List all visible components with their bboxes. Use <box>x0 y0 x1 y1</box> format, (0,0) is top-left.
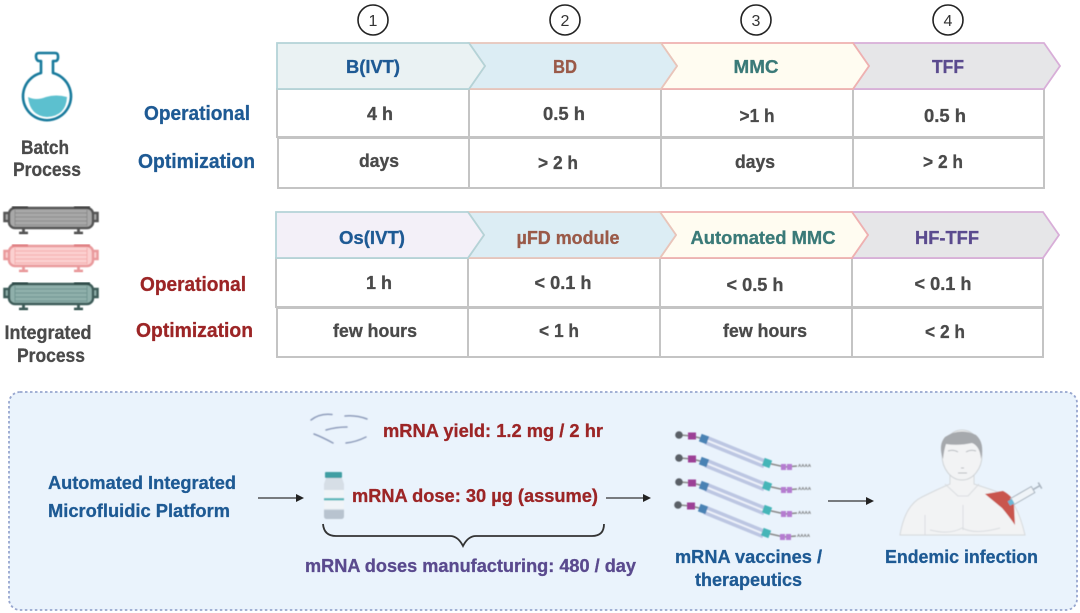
mRNA construct 2: AAAA <box>798 486 812 491</box>
batch optimization values <box>359 151 963 173</box>
step 1 marker: 1 <box>369 13 378 30</box>
icon: pink hollow fiber module <box>4 246 98 271</box>
step 2 marker <box>550 5 580 35</box>
integrated optimization values: < 2 h <box>925 322 965 342</box>
integrated header labels <box>339 228 979 248</box>
mRNA vaccines label: therapeutics <box>695 569 802 590</box>
integrated optimization values: few hours <box>333 321 417 341</box>
integrated operational values <box>366 273 972 295</box>
icon: green hollow fiber module <box>4 284 98 309</box>
mRNA vaccines label <box>675 546 822 590</box>
icon: grey hollow fiber module <box>4 208 98 233</box>
batch row labels <box>138 103 255 173</box>
batch operational values: 0.5 h <box>543 104 585 124</box>
step 3 marker <box>741 5 771 35</box>
brace <box>323 524 604 546</box>
arrow: platform to dose <box>258 494 304 502</box>
batch operational values: >1 h <box>740 106 774 126</box>
doses manufacturing text: mRNA doses manufacturing: 480 / day <box>305 555 637 576</box>
batch optimization values: days <box>359 151 399 171</box>
integrated table grid <box>276 258 1043 357</box>
panel: automated integrated platform <box>9 392 1077 610</box>
step 3 marker: 3 <box>752 13 761 30</box>
endemic infection label: Endemic infection <box>885 546 1038 567</box>
batch optimization values: > 2 h <box>538 153 578 173</box>
batch header labels: MMC <box>734 57 778 77</box>
integrated header labels: Os(IVT) <box>339 228 405 248</box>
integrated row labels: Optimization <box>136 320 253 342</box>
mRNA dose text: mRNA dose: 30 µg (assume) <box>352 485 598 506</box>
panel: batch process table <box>277 43 1060 188</box>
panel: integrated process table <box>276 212 1059 357</box>
integrated optimization values <box>333 321 965 342</box>
integrated header labels: Automated MMC <box>690 228 836 248</box>
icon: batch flask <box>23 53 71 120</box>
integrated operational values: < 0.1 h <box>914 274 972 294</box>
integrated operational values: < 0.1 h <box>534 273 592 293</box>
batch optimization values: > 2 h <box>923 152 963 172</box>
integrated row labels: Operational <box>140 274 246 296</box>
step 4 marker <box>933 5 963 35</box>
integrated header chevrons <box>276 212 1059 258</box>
icon: vial <box>324 472 344 519</box>
platform title: Microfluidic Platform <box>48 500 230 521</box>
icon: patient receiving injection <box>900 430 1042 535</box>
integrated header labels: HF-TFF <box>915 228 979 248</box>
step 1 marker <box>358 5 388 35</box>
batch table grid <box>277 89 1044 188</box>
integrated row labels <box>136 274 253 342</box>
integrated operational values: < 0.5 h <box>726 275 784 295</box>
mRNA construct 1: AAAA <box>798 463 812 468</box>
batch row labels: Operational <box>144 103 250 125</box>
step 4 marker: 4 <box>944 13 953 30</box>
batch process label: Process <box>13 160 81 181</box>
batch header labels <box>346 57 964 77</box>
mRNA yield text: mRNA yield: 1.2 mg / 2 hr <box>383 420 603 441</box>
batch operational values: 4 h <box>367 104 393 124</box>
batch header labels: BD <box>553 57 577 77</box>
batch row labels: Optimization <box>138 151 255 173</box>
batch header labels: TFF <box>932 57 964 77</box>
batch header chevrons <box>277 43 1060 89</box>
batch operational values <box>367 104 966 126</box>
icon: mRNA constructs <box>674 431 812 540</box>
integrated optimization values: < 1 h <box>539 321 579 341</box>
integrated process label: Process <box>17 346 85 367</box>
integrated operational values: 1 h <box>366 273 392 293</box>
mRNA construct 3: AAAA <box>798 510 812 515</box>
batch process label: Batch <box>21 138 69 159</box>
arrow: vaccines to patient <box>828 497 874 505</box>
integrated header labels: µFD module <box>516 228 620 248</box>
integrated process label <box>4 323 92 367</box>
batch optimization values: days <box>735 152 775 172</box>
mRNA construct 4: AAAA <box>797 533 811 538</box>
platform title <box>48 472 236 521</box>
step 2 marker: 2 <box>561 13 570 30</box>
step numbers <box>358 5 963 35</box>
icon: mRNA strands <box>311 414 367 443</box>
batch operational values: 0.5 h <box>924 106 966 126</box>
mRNA vaccines label: mRNA vaccines / <box>675 546 822 567</box>
batch process label <box>13 138 81 181</box>
platform title: Automated Integrated <box>48 472 236 493</box>
batch header labels: B(IVT) <box>346 57 400 77</box>
integrated optimization values: few hours <box>723 321 807 341</box>
arrow: dose to vaccines <box>606 494 651 502</box>
integrated process label: Integrated <box>4 323 92 344</box>
